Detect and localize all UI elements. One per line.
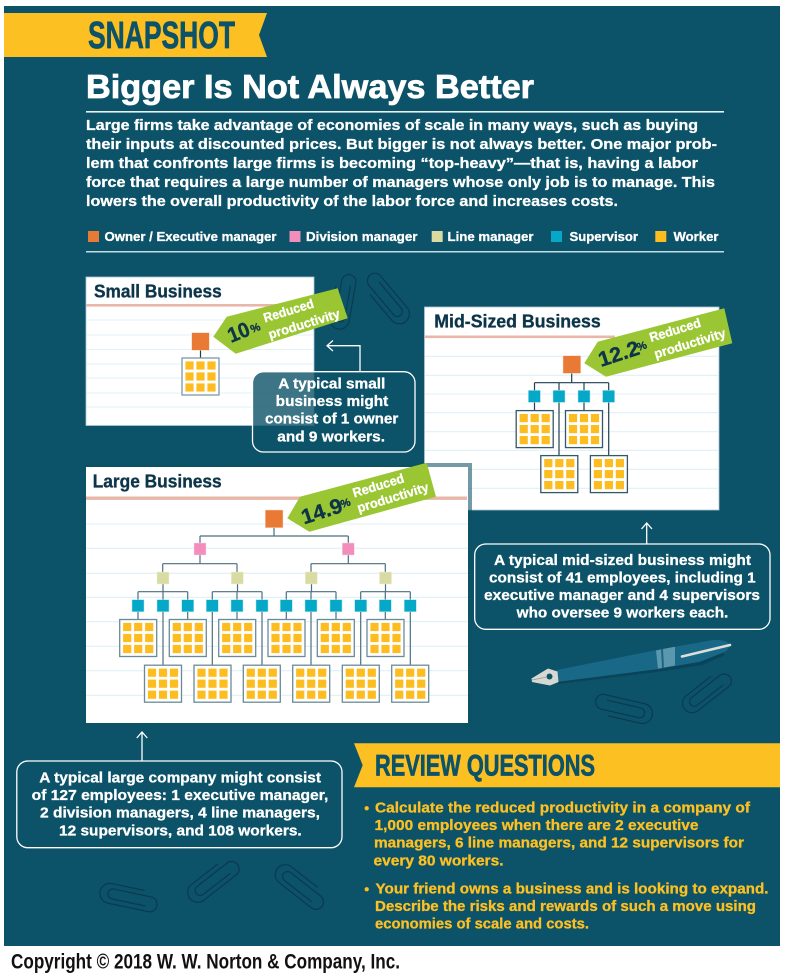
callout: small business [252, 372, 415, 452]
tag: small business 10%: productivity [266, 306, 342, 342]
title: Bigger Is Not Always Better [86, 68, 534, 105]
callout: mid-sized business: consist of 41 employees, including 1 [489, 570, 756, 586]
paper clips near pen [593, 667, 734, 725]
callout: large business: 2 division managers, 4 line managers, [40, 805, 320, 822]
legend: Supervisor [570, 230, 638, 244]
intro paragraph [86, 117, 717, 210]
review question 2 [365, 881, 768, 932]
org chart: small business [182, 333, 219, 395]
panel: mid-sized business [424, 307, 719, 510]
callout: mid-sized business: who oversee 9 workers each. [516, 605, 728, 622]
snapshot banner [4, 13, 267, 57]
paper clips bottom [98, 855, 330, 913]
review question 1 [365, 800, 750, 869]
callout: mid-sized business: executive manager and 4 supervisors [484, 587, 760, 604]
arrow: small business callout [327, 340, 360, 372]
callout: mid-sized business [475, 544, 770, 629]
tag: small business 10%: Reduced [261, 296, 316, 325]
arrow: mid-sized business callout [642, 523, 652, 544]
legend: Division manager [306, 230, 418, 244]
review question 2: economies of scale and costs. [375, 916, 589, 932]
panel: large business [84, 465, 470, 725]
tag: large business 14.9%: Reduced [351, 471, 406, 500]
tag: small business 10% [213, 288, 348, 354]
snapshot banner: SNAPSHOT [88, 15, 235, 57]
copyright: Copyright © 2018 W. W. Norton & Company, Inc. [11, 950, 400, 973]
panel: small business [86, 277, 314, 426]
tag: large business 14.9%: 14.9 [298, 494, 345, 529]
tag: mid-sized business 12.2% [584, 308, 732, 377]
legend: Line manager [448, 230, 534, 244]
review question 2: Your friend owns a business and is looking to expand. [376, 881, 768, 897]
callout: small business: A typical small [278, 375, 385, 392]
callout: large business: A typical large company might consist [39, 769, 321, 786]
callout: small business: business might [276, 393, 388, 410]
intro paragraph: lowers the overall productivity of the labor force and increases costs. [86, 193, 618, 210]
review question 1: 1,000 employees when there are 2 executive [374, 818, 698, 834]
callout: mid-sized business: A typical mid-sized business might [494, 552, 751, 569]
callout: large business [17, 761, 342, 848]
intro paragraph: their inputs at discounted prices. But bigger is not always better. One major prob- [86, 136, 717, 153]
org chart: mid-sized business [516, 356, 627, 493]
tag: small business 10%: % [249, 321, 262, 336]
tag: large business 14.9% [287, 463, 436, 532]
tag: mid-sized business 12.2%: productivity [652, 325, 728, 361]
legend: Owner / Executive manager [104, 230, 277, 244]
tag: large business 14.9%: % [339, 496, 352, 511]
legend [88, 230, 719, 244]
heading: small business: Small Business [94, 282, 222, 302]
review questions banner: REVIEW QUESTIONS [375, 750, 595, 783]
review question 2: Describe the risks and rewards of such a move using [375, 899, 756, 915]
tag: mid-sized business 12.2%: 12.2 [595, 337, 642, 372]
org chart: large business [120, 510, 429, 702]
review question 1: Calculate the reduced productivity in a company of [375, 800, 750, 816]
review question 1: every 80 workers. [374, 853, 504, 869]
tag: mid-sized business 12.2%: % [636, 339, 649, 354]
intro paragraph: Large firms take advantage of economies of scale in many ways, such as buying [86, 117, 698, 134]
paper clips near small business [329, 270, 413, 331]
callout: small business: and 9 workers. [277, 428, 385, 446]
heading: large business: Large Business [93, 472, 222, 492]
tag: small business 10%: 10 [224, 318, 253, 348]
callout: large business: of 127 employees: 1 executive manager, [32, 787, 328, 804]
arrow: large business callout [137, 732, 147, 761]
review question 1: managers, 6 line managers, and 12 supervisors for [374, 836, 744, 852]
tag: mid-sized business 12.2%: Reduced [647, 315, 703, 345]
legend: Worker [674, 230, 719, 244]
tag: large business 14.9%: productivity [355, 479, 431, 515]
callout: small business: consist of 1 owner [265, 411, 398, 428]
heading: mid-sized business: Mid-Sized Business [434, 312, 601, 332]
icon: pen [532, 640, 730, 686]
intro paragraph: force that requires a large number of managers whose only job is to manage. This [86, 174, 715, 191]
intro paragraph: lem that confronts large firms is becoming “top-heavy”—that is, having a labor [86, 155, 698, 172]
review questions banner [354, 743, 780, 787]
callout: large business: 12 supervisors, and 108 workers. [59, 822, 302, 839]
